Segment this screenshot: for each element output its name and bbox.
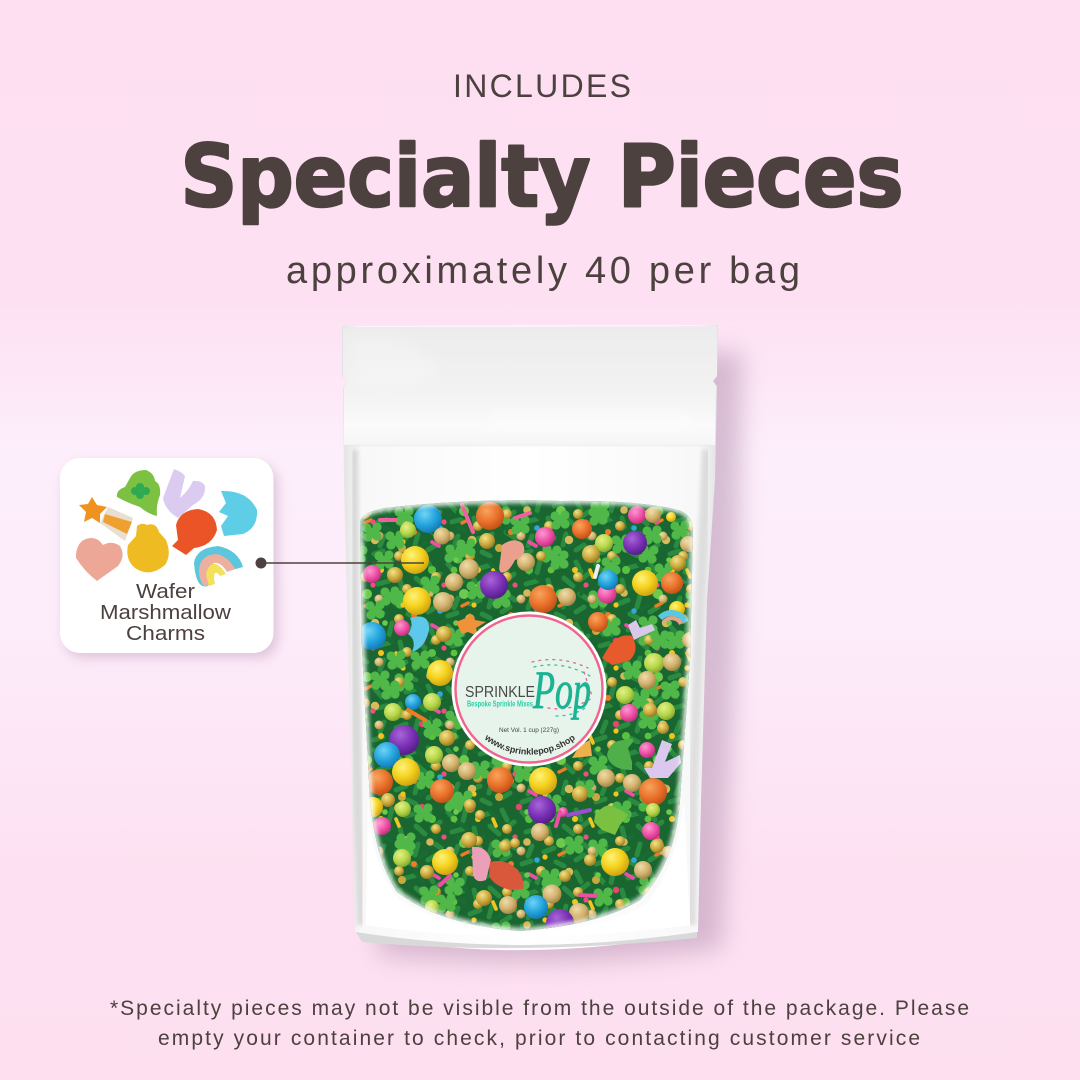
charm: pink heart lower <box>472 847 491 881</box>
callout pointer line <box>256 558 424 568</box>
charm: green hat lower <box>594 805 628 835</box>
tagline: Bespoke Sprinkle Mixes <box>467 700 533 708</box>
icon: rainbow charm <box>194 546 243 587</box>
charm: rainbow right <box>660 613 686 624</box>
footnote: empty your container to check, prior to contacting customer service <box>158 1027 920 1050</box>
callout card shadow <box>64 464 278 658</box>
bag edges <box>353 450 362 925</box>
charm: red balloon right <box>602 635 636 665</box>
charm: lilac piece top right <box>628 620 655 640</box>
charm: green moon <box>607 738 633 770</box>
charm: peach star behind label <box>572 740 592 758</box>
specialty charms in mix <box>380 505 686 896</box>
product bag <box>342 325 718 950</box>
window fade <box>360 500 693 931</box>
card label: Charms <box>126 623 205 645</box>
sugar balls <box>358 502 698 937</box>
charm: blue moon left <box>408 616 429 652</box>
sprinkle window <box>350 495 700 940</box>
icon: yellow pot charm <box>127 524 169 572</box>
subtitle: approximately 40 per bag <box>286 250 800 292</box>
card panel <box>60 458 274 653</box>
charm: orange star <box>456 613 486 636</box>
confetti <box>532 660 592 716</box>
bag bottom white pool <box>366 800 690 936</box>
bag shadow <box>378 352 742 962</box>
bag body <box>342 325 718 950</box>
brand: pop: Pop <box>532 660 591 720</box>
net volume: Net Vol. 1 cup (227g) <box>499 727 559 734</box>
label disc <box>452 612 606 766</box>
eyebrow: includes: INCLUDES <box>453 68 631 104</box>
footnote <box>110 997 969 1050</box>
charm: red balloon lower <box>489 861 523 890</box>
bag top seal <box>343 326 717 446</box>
icon: star charm <box>79 497 133 541</box>
icon: red balloon charm <box>172 509 217 555</box>
website: www.sprinklepop.shop <box>485 735 575 756</box>
brand: sprinkle: SPRINKLE <box>465 684 535 701</box>
card label: Wafer <box>136 581 195 603</box>
bag bottom gusset <box>356 932 697 948</box>
icon: lilac horseshoe charm <box>163 469 205 518</box>
card label <box>100 581 232 645</box>
sprinkle accents <box>380 505 600 896</box>
clover sprinkles <box>362 500 690 913</box>
icon: green hat charm <box>117 470 160 516</box>
charm: lilac horseshoe <box>644 740 681 778</box>
icon: blue moon charm <box>219 491 257 536</box>
footnote: *Specialty pieces may not be visible from the outside of the package. Please <box>110 997 969 1020</box>
icon: heart charm <box>76 538 123 581</box>
card label: Marshmallow <box>100 602 232 624</box>
title: Specialty Pieces <box>180 127 904 227</box>
charm: pink heart top <box>499 540 524 573</box>
round label <box>452 612 606 766</box>
callout card <box>60 458 274 653</box>
sprinkle texture <box>350 495 700 940</box>
